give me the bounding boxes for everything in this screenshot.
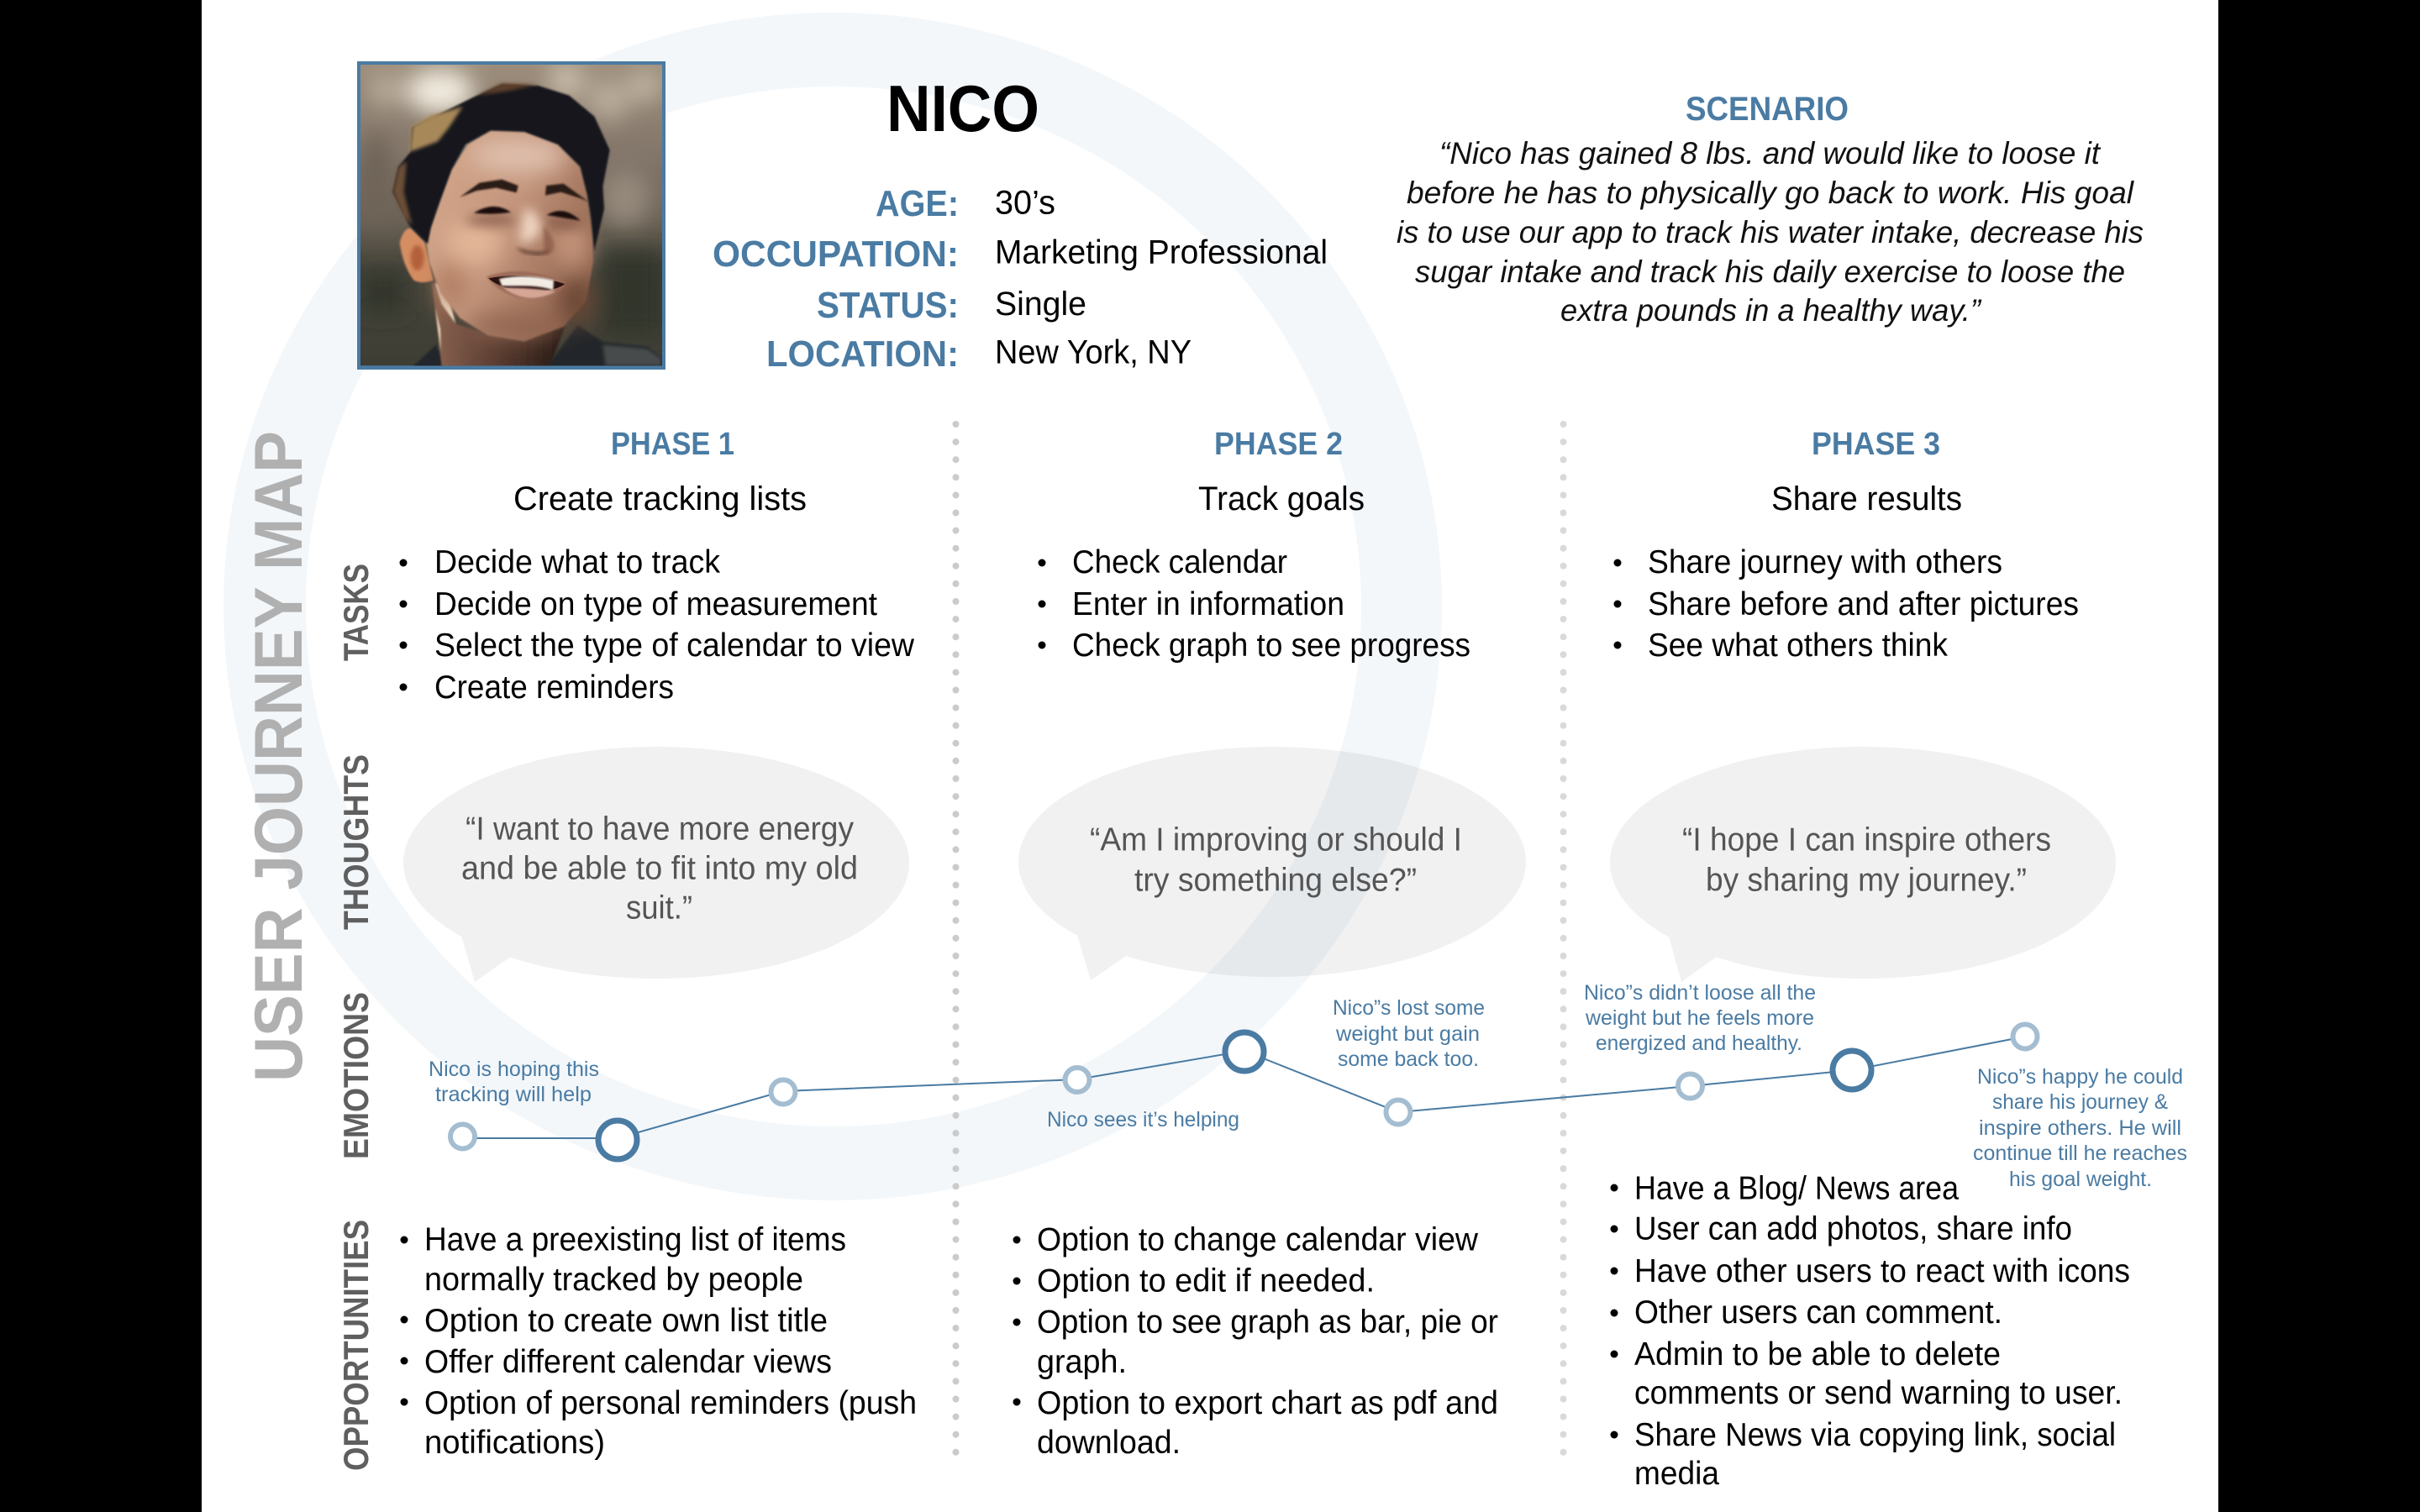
- photo: neck: [432, 281, 565, 367]
- photo: eyebrows: [460, 180, 589, 202]
- phase 2 tasks: [1039, 544, 1470, 664]
- detail: age: [876, 183, 1055, 224]
- phase 3 header: [1771, 427, 1962, 517]
- phase 3 opportunities: Have a Blog/ News area: [1634, 1171, 1959, 1206]
- thought text: phase 1: and be able to fit into my old: [461, 850, 858, 887]
- phase 1 opportunities: normally tracked by people: [424, 1262, 803, 1298]
- caption: happy: [1973, 1065, 2187, 1191]
- thought text: phase 1: [461, 811, 858, 926]
- speech bubble: phase 1 thought shape: [403, 747, 909, 982]
- photo: rim light on neck: [434, 283, 455, 352]
- phase 3 tasks: [1613, 544, 2079, 664]
- emotion line: [462, 1037, 2025, 1138]
- scenario quote: [1397, 136, 2144, 328]
- detail: occupation: OCCUPATION:: [713, 234, 959, 275]
- thought text: phase 2: “Am I improving or should I: [1090, 822, 1462, 858]
- phase 2 opportunities: download.: [1037, 1425, 1181, 1461]
- phase 3 tasks: See what others think: [1648, 627, 1948, 664]
- phase 2 opportunities: [1013, 1221, 1498, 1461]
- detail: status: Single: [995, 286, 1086, 323]
- phase 2 header: [1198, 427, 1365, 517]
- caption: hoping: tracking will help: [435, 1083, 592, 1106]
- thought text: phase 2: [1090, 822, 1462, 899]
- phase 3 opportunities: Share News via copying link, social: [1634, 1417, 2116, 1453]
- persona photo: [357, 61, 666, 370]
- caption: happy: his goal weight.: [2009, 1168, 2152, 1191]
- thought text: phase 3: “I hope I can inspire others: [1682, 822, 2051, 858]
- row label: thoughts: THOUGHTS: [336, 754, 376, 930]
- phase 1 header: PHASE 1: [611, 427, 734, 462]
- caption: happy: inspire others. He will: [1979, 1116, 2181, 1140]
- phase 1 opportunities: Option to create own list title: [424, 1303, 828, 1339]
- phase 2 opportunities: Option to export chart as pdf and: [1037, 1385, 1498, 1421]
- speech bubble: phase 3 thought shape: [1610, 747, 2116, 982]
- scenario quote: extra pounds in a healthy way.”: [1560, 293, 1982, 328]
- thought text: phase 3: by sharing my journey.”: [1706, 862, 2027, 899]
- phase 3 header: Share results: [1771, 480, 1962, 517]
- map title: vertical: USER JOURNEY MAP: [241, 431, 317, 1082]
- detail: location: New York, NY: [995, 334, 1192, 371]
- caption: lost some weight: [1333, 996, 1485, 1071]
- caption: happy: share his journey &: [1992, 1090, 2168, 1114]
- thought text: phase 1: “I want to have more energy: [466, 811, 854, 847]
- phase 3 opportunities: Other users can comment.: [1634, 1294, 2002, 1331]
- caption: lost some weight: weight but gain: [1335, 1022, 1480, 1046]
- phase 1 tasks: Decide what to track: [434, 544, 720, 580]
- scenario quote: is to use our app to track his water intake, decrease his: [1397, 215, 2144, 249]
- caption: hoping: Nico is hoping this: [429, 1058, 599, 1081]
- scenario quote: before he has to physically go back to work. His goal: [1407, 176, 2135, 210]
- phase 3 opportunities: Have other users to react with icons: [1634, 1253, 2130, 1289]
- phase 1 opportunities: Option of personal reminders (push: [424, 1385, 917, 1421]
- row label: opportunities: OPPORTUNITIES: [336, 1220, 376, 1471]
- detail: location: LOCATION:: [766, 333, 959, 375]
- caption: lost some weight: Nico”s lost some: [1333, 996, 1485, 1020]
- dotted column dividers: [953, 424, 960, 1457]
- detail: age: 30’s: [995, 185, 1055, 222]
- decorative ring behind the content: [224, 13, 1442, 1200]
- emotion nodes: [450, 1025, 2037, 1159]
- photo: jacket: [413, 325, 663, 367]
- caption: happy: continue till he reaches: [1973, 1142, 2187, 1165]
- phase 1 header: [513, 427, 807, 517]
- phase 1 opportunities: notifications): [424, 1425, 605, 1461]
- photo: hair: [392, 84, 610, 251]
- phase 1 opportunities: Offer different calendar views: [424, 1344, 832, 1380]
- detail: status: [817, 285, 1086, 326]
- phase 3 opportunities: media: [1634, 1456, 1719, 1492]
- phase 3 opportunities: comments or send warning to user.: [1634, 1375, 2123, 1411]
- speech bubble: phase 2 thought shape: [1018, 747, 1526, 980]
- phase 3 opportunities: Admin to be able to delete: [1634, 1336, 2001, 1373]
- phase 3 opportunities: [1610, 1171, 2130, 1492]
- phase 2 header: Track goals: [1198, 480, 1365, 517]
- detail: location: [766, 333, 1192, 375]
- caption: energized: energized and healthy.: [1596, 1032, 1802, 1055]
- phase 2 opportunities: Option to edit if needed.: [1037, 1263, 1375, 1299]
- phase 1 tasks: [400, 544, 915, 706]
- detail: age: AGE:: [876, 183, 959, 224]
- caption: helping: Nico sees it’s helping: [1047, 1108, 1239, 1131]
- phase 2 tasks: Check calendar: [1072, 544, 1287, 580]
- phase 3 tasks: Share journey with others: [1648, 544, 2002, 580]
- caption: energized: [1584, 981, 1816, 1055]
- caption: lost some weight: some back too.: [1338, 1047, 1479, 1071]
- photo: smile: [487, 271, 566, 299]
- photo: nostrils: [517, 248, 551, 255]
- phase 2 opportunities: graph.: [1037, 1344, 1127, 1380]
- phase 1 header: Create tracking lists: [513, 480, 807, 517]
- thought text: phase 3: [1682, 822, 2051, 899]
- photo: face: [426, 130, 593, 341]
- phase 3 header: PHASE 3: [1812, 427, 1940, 462]
- row label: tasks: TASKS: [336, 564, 376, 661]
- phase 2 header: PHASE 2: [1214, 427, 1343, 462]
- thought text: phase 1: suit.”: [626, 890, 692, 926]
- row label: emotions: EMOTIONS: [336, 992, 376, 1159]
- phase 1 tasks: Select the type of calendar to view: [434, 627, 915, 664]
- caption: energized: Nico”s didn’t loose all the: [1584, 981, 1816, 1005]
- detail: occupation: [713, 234, 1328, 275]
- caption: happy: Nico”s happy he could: [1977, 1065, 2183, 1089]
- thought text: phase 2: try something else?”: [1134, 862, 1417, 899]
- caption: energized: weight but he feels more: [1585, 1006, 1814, 1030]
- phase 1 opportunities: [400, 1221, 917, 1461]
- phase 1 tasks: Create reminders: [434, 669, 674, 706]
- persona details: [713, 183, 1328, 375]
- phase 2 opportunities: Option to see graph as bar, pie or: [1037, 1304, 1498, 1341]
- detail: status: STATUS:: [817, 285, 959, 326]
- photo: ear: [400, 228, 434, 282]
- emotion chart: [429, 981, 2187, 1191]
- detail: occupation: Marketing Professional: [995, 234, 1328, 270]
- scenario heading: SCENARIO: [1686, 91, 1849, 128]
- phase 2 tasks: Check graph to see progress: [1072, 627, 1470, 664]
- phase 3 tasks: Share before and after pictures: [1648, 586, 2079, 622]
- photo: eyes: [474, 207, 581, 221]
- scenario: [1397, 91, 2144, 328]
- phase 2 tasks: Enter in information: [1072, 586, 1344, 622]
- scenario quote: sugar intake and track his daily exercise to loose the: [1415, 255, 2125, 289]
- scenario quote: “Nico has gained 8 lbs. and would like to loose it: [1439, 136, 2102, 171]
- phase 1 tasks: Decide on type of measurement: [434, 586, 877, 622]
- phase 3 opportunities: User can add photos, share info: [1634, 1211, 2072, 1247]
- caption: hoping: [429, 1058, 599, 1106]
- title: persona name: NICO: [886, 71, 1039, 145]
- phase 2 opportunities: Option to change calendar view: [1037, 1221, 1479, 1258]
- phase 1 opportunities: Have a preexisting list of items: [424, 1221, 846, 1258]
